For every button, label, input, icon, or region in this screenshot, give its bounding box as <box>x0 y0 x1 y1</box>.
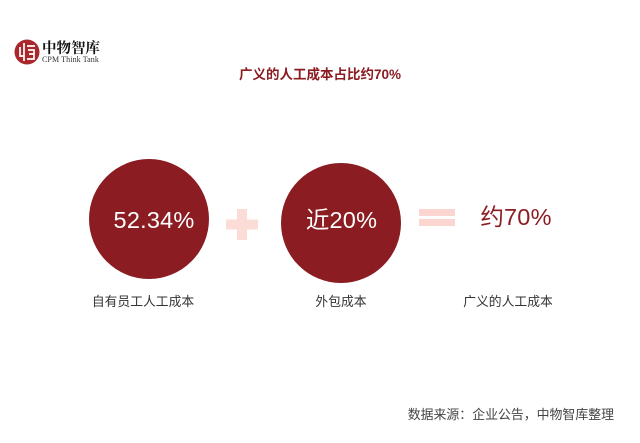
equals sign <box>419 209 455 226</box>
equals bar top <box>419 209 455 216</box>
circle: outsourcing cost <box>281 163 401 283</box>
equals bar bottom <box>419 219 455 226</box>
logo <box>14 37 100 64</box>
label: own staff cost: 自有员工人工成本 <box>92 294 194 309</box>
logo subtitle: CPM Think Tank <box>42 55 99 64</box>
label: broad labour cost: 广义的人工成本 <box>463 294 553 309</box>
label: outsourcing cost: 外包成本 <box>315 294 367 309</box>
icon: logo seal <box>14 40 40 64</box>
source note: 数据来源：企业公告，中物智库整理 <box>408 407 614 422</box>
logo name: 中物智库 <box>42 37 100 58</box>
plus sign <box>226 209 258 240</box>
circle: own staff cost <box>89 159 209 279</box>
value: nearly 20%: 近20% <box>306 207 377 233</box>
title: 广义的人工成本占比约70% <box>239 67 401 82</box>
result: about 70%: 约70% <box>480 204 552 230</box>
value: 52.34%: 52.34% <box>114 207 194 233</box>
